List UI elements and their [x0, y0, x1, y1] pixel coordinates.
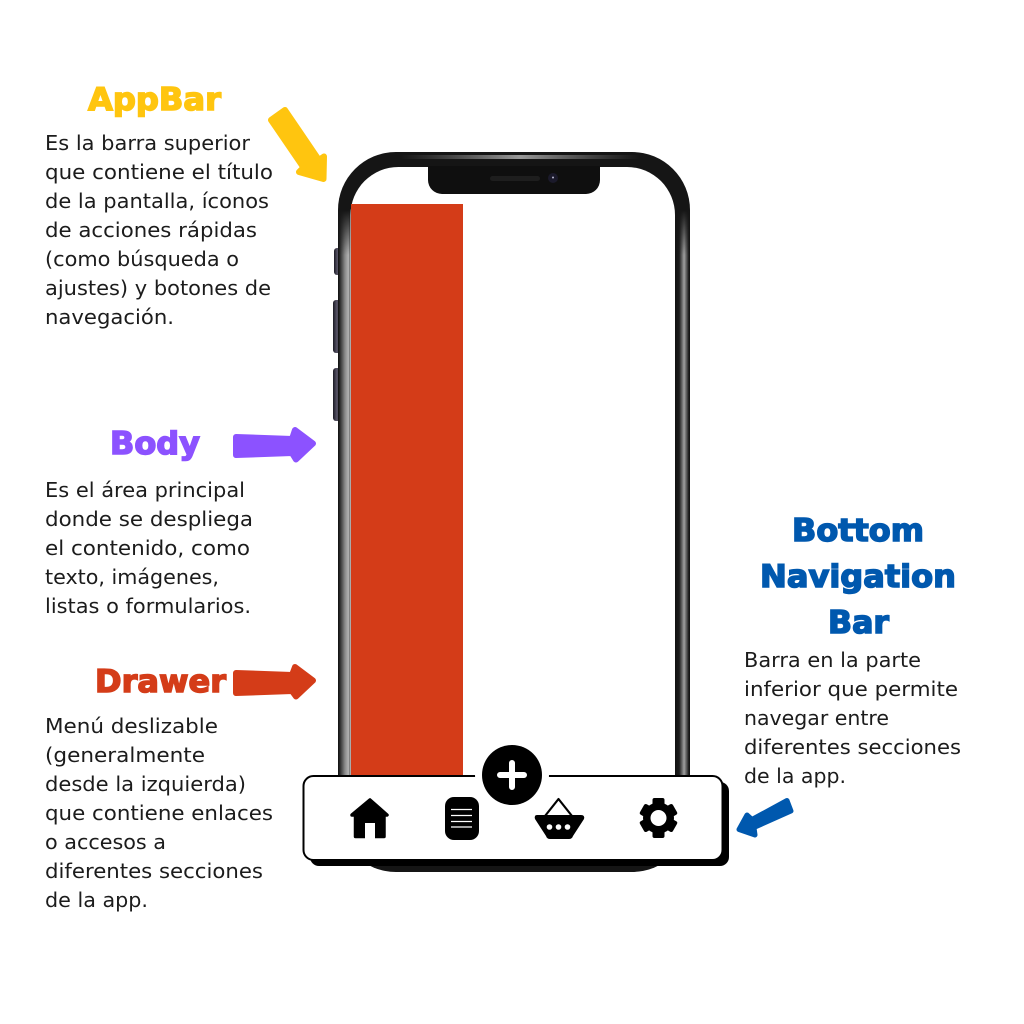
arrow: AppBar	[271, 110, 324, 179]
text: AppBar description: de la pantalla, íconos	[45, 189, 269, 213]
text: Bottom Navigation Bar description: inferior que permite	[744, 677, 958, 701]
heading: Drawer: Drawer	[95, 664, 227, 700]
text: Body description: Es el área principal	[45, 478, 245, 502]
Drawer section	[45, 664, 279, 912]
heading: Bottom Navigation Bar: Bottom	[792, 513, 924, 549]
text: Drawer description: (generalmente	[45, 743, 205, 767]
bar shadow	[310, 782, 729, 866]
text: AppBar description: que contiene el título	[45, 160, 273, 184]
bar panel	[304, 776, 722, 860]
text: AppBar description: navegación.	[45, 305, 174, 329]
bezel highlights	[339, 155, 689, 785]
text: Bottom Navigation Bar description: navegar entre	[744, 706, 889, 730]
text: Drawer description: o accesos a	[45, 830, 166, 854]
text: Bottom Navigation Bar description: Barra en la parte	[744, 648, 921, 672]
icon: home	[352, 800, 387, 840]
drawer panel	[351, 204, 463, 778]
heading: Body: Body	[110, 426, 200, 462]
bottom navigation bar	[304, 738, 729, 866]
heading: AppBar: AppBar	[88, 82, 222, 118]
text: Drawer description: que contiene enlaces	[45, 801, 273, 825]
text: Drawer description: de la app.	[45, 888, 148, 912]
Bottom Navigation Bar section	[744, 513, 967, 788]
arrow: Drawer	[236, 667, 313, 696]
text: Drawer description: desde la izquierda)	[45, 772, 246, 796]
text: AppBar description: de acciones rápidas	[45, 218, 257, 242]
notch with speaker and camera	[428, 166, 600, 194]
icon: settings gear	[639, 798, 678, 838]
plus button	[475, 738, 549, 812]
arrow: Body	[236, 430, 313, 460]
text: AppBar description: ajustes) y botones de	[45, 276, 271, 300]
text: Body description: texto, imágenes,	[45, 565, 219, 589]
phone screen	[350, 167, 675, 857]
heading: Bottom Navigation Bar: Navigation	[760, 559, 956, 595]
heading: Bottom Navigation Bar: Bar	[828, 605, 890, 641]
text: Body description: el contenido, como	[45, 536, 250, 560]
text: AppBar description: Es la barra superior	[45, 131, 251, 155]
side buttons	[333, 248, 341, 421]
arrow: Bottom Navigation Bar	[739, 800, 791, 835]
icon: basket	[535, 799, 584, 839]
icon: notes	[445, 797, 479, 840]
text: Drawer description: diferentes secciones	[45, 859, 263, 883]
text: Drawer description: Menú deslizable	[45, 714, 218, 738]
phone mockup	[333, 152, 690, 872]
text: Bottom Navigation Bar description: de la app.	[744, 764, 846, 788]
Body section	[45, 426, 259, 618]
phone body	[338, 152, 690, 872]
text: Body description: listas o formularios.	[45, 594, 251, 618]
AppBar section	[45, 82, 279, 329]
text: AppBar description: (como búsqueda o	[45, 247, 239, 271]
text: Body description: donde se despliega	[45, 507, 253, 531]
text: Bottom Navigation Bar description: diferentes secciones	[744, 735, 961, 759]
